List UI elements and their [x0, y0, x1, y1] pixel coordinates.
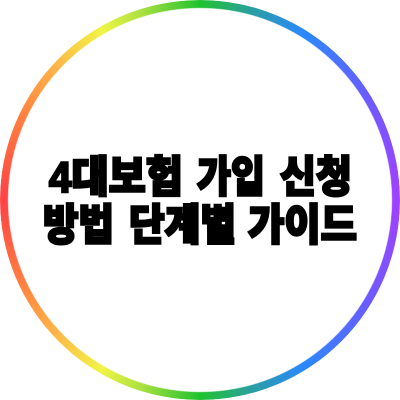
- title line 2: 방법: [43, 202, 114, 250]
- title line 1: 4대보험: [49, 154, 183, 202]
- title line 2: [43, 202, 357, 250]
- title line 1: [49, 154, 352, 202]
- title line 1: 신청: [280, 154, 352, 202]
- title line 1: 가입: [197, 154, 265, 202]
- title line 2: 단계별: [129, 202, 236, 250]
- title line 2: 가이드: [248, 202, 357, 250]
